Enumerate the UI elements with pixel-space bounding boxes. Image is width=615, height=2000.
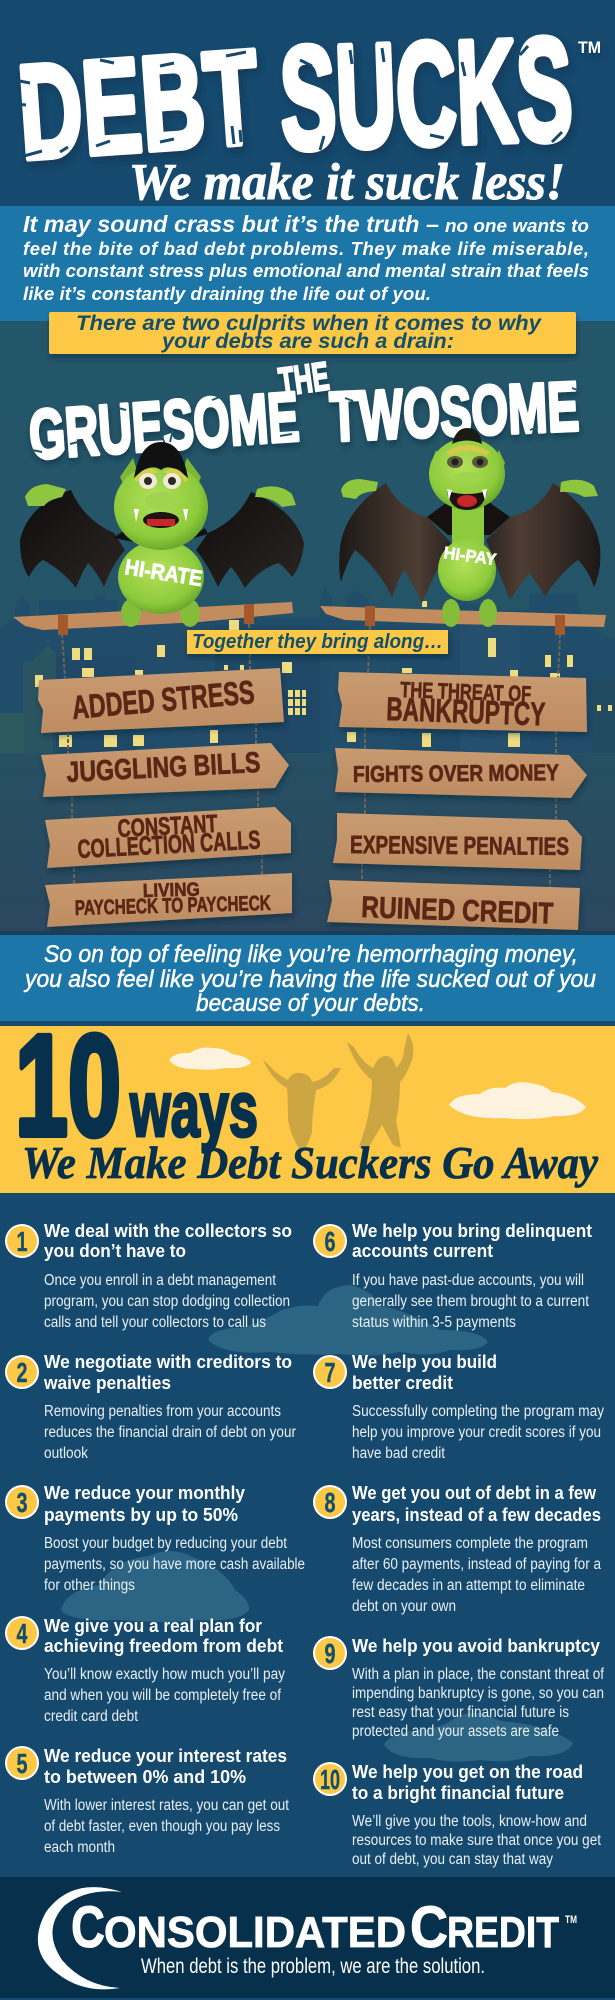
intro paragraph: It may sound crass but it’s the truth –: [23, 211, 439, 237]
sign: living paycheck to paycheck: [45, 873, 292, 927]
item 4: real plan: We give you a real plan for: [44, 1615, 262, 1636]
sign: ruined credit: [327, 880, 580, 931]
callout: two culprits: [49, 312, 576, 354]
panel: ten ways heading band: [0, 1005, 615, 1193]
tagline: When debt is the problem, we are the solution.: [141, 1955, 485, 1978]
item 6: delinquent accounts: 6: [324, 1226, 336, 1257]
item 3: monthly payments: 3: [16, 1487, 28, 1518]
callout: two culprits: your debts are such a drain:: [161, 330, 454, 353]
wings: [339, 483, 600, 603]
wordmark: C: [410, 1895, 448, 1960]
heading texture: torn edges: [32, 384, 580, 452]
monster: Hi-Pay: [339, 428, 600, 627]
item 1: collectors: [5, 1220, 292, 1331]
icon: crescent: [38, 1887, 122, 1989]
branch: right perch: [320, 606, 606, 635]
item 1: collectors: Once you enroll in a debt management: [44, 1272, 277, 1289]
item 1: collectors: We deal with the collectors so: [44, 1220, 292, 1241]
wordmark: TM: [565, 1914, 577, 1926]
intro paragraph: feel the bite of bad debt problems. They make life miserable,: [23, 238, 589, 259]
intro paragraph: no one wants to: [445, 215, 589, 236]
title texture: torn edges on the lettering: [14, 46, 562, 156]
item 3: monthly payments: for other things: [44, 1577, 135, 1594]
item 8: out of debt in years: Most consumers complete the program: [352, 1535, 588, 1552]
badge text: HI-PAY: [442, 543, 498, 569]
sign: ruined credit: RUINED CREDIT: [361, 891, 554, 931]
callout: two culprits: There are two culprits when it comes to why: [76, 312, 542, 335]
item 8: out of debt in years: [313, 1482, 601, 1615]
panel: hemorrhaging money band: [0, 931, 615, 1026]
item 6: delinquent accounts: If you have past-due accounts, you will: [352, 1272, 584, 1289]
intro paragraph: with constant stress plus emotional and mental strain that feels: [23, 260, 589, 281]
item 6: delinquent accounts: We help you bring delinquent: [352, 1220, 592, 1241]
badge text: HI-RATE: [123, 554, 204, 591]
wordmark: C: [71, 1895, 105, 1960]
sign: fights over money: [335, 748, 587, 798]
sign: the threat of bankruptcy: BANKRUPTCY: [386, 690, 546, 733]
item 5: interest rates: With lower interest rates, you can get out: [44, 1797, 290, 1814]
intro paragraph: [23, 211, 589, 304]
item 4: real plan: 4: [16, 1618, 28, 1649]
item 9: avoid bankruptcy: rest easy that your financial future is: [352, 1704, 569, 1721]
item 3: monthly payments: payments by up to 50%: [44, 1504, 238, 1525]
lit windows: [35, 601, 612, 747]
item 10: bright financial future: We help you get on the road: [352, 1761, 583, 1782]
title: Debt Sucks: [14, 7, 601, 188]
background clouds: [61, 1285, 573, 1762]
wordmark: REDIT: [447, 1908, 559, 1957]
heading: The Gruesome Twosome: THE: [276, 354, 332, 405]
heading: 10 ways: 10: [15, 1005, 121, 1166]
panel: header background: [0, 0, 615, 206]
sign: constant collection calls: COLLECTION CALLS: [77, 824, 261, 864]
panel: ten ways heading band: ways: [129, 1064, 258, 1153]
sign: constant collection calls: CONSTANT: [117, 810, 218, 843]
item 9: avoid bankruptcy: protected and your assets are safe: [352, 1723, 559, 1740]
item 8: out of debt in years: few decades in an attempt to eliminate: [352, 1577, 585, 1594]
item 7: better credit: have bad credit: [352, 1445, 446, 1462]
item 9: avoid bankruptcy: 9: [324, 1638, 336, 1669]
silhouettes: jumping people: [263, 1033, 413, 1153]
item 10: bright financial future: We’ll give you the tools, know-how and: [352, 1813, 587, 1830]
item 2: penalties: outlook: [44, 1445, 88, 1462]
item 9: avoid bankruptcy: We help you avoid bankruptcy: [352, 1635, 601, 1656]
sign: constant collection calls: [45, 807, 291, 868]
item 3: monthly payments: Boost your budget by reducing your debt: [44, 1535, 288, 1552]
heading: The Gruesome Twosome: GRUESOME: [27, 377, 301, 474]
item 4: real plan: achieving freedom from debt: [44, 1635, 283, 1656]
sign: fights over money: FIGHTS OVER MONEY: [353, 759, 559, 787]
sign: expensive penalties: [333, 813, 582, 870]
callout: together they bring along: Together they bring along…: [192, 631, 443, 653]
panel: footer logo: [0, 1877, 615, 2000]
skyline illustration: [0, 588, 615, 753]
item 5: interest rates: 5: [16, 1748, 28, 1779]
item 7: better credit: We help you build: [352, 1351, 497, 1372]
item 9: avoid bankruptcy: [313, 1635, 605, 1740]
item 4: real plan: [5, 1615, 285, 1725]
item 1: collectors: program, you can stop dodging collection: [44, 1293, 290, 1310]
item 3: monthly payments: We reduce your monthly: [44, 1482, 246, 1503]
item 7: better credit: better credit: [352, 1372, 453, 1393]
title: Debt Sucks: DEBT: [14, 23, 263, 188]
heading: The Gruesome Twosome: [27, 354, 580, 474]
item 5: interest rates: each month: [44, 1839, 115, 1856]
panel: intro text band: [0, 206, 615, 321]
item 5: interest rates: of debt faster, even though you pay less: [44, 1818, 280, 1835]
wings: [20, 490, 304, 588]
item 7: better credit: 7: [324, 1357, 336, 1388]
item 2: penalties: [5, 1351, 296, 1462]
item 5: interest rates: to between 0% and 10%: [44, 1766, 246, 1787]
item 2: penalties: waive penalties: [43, 1372, 171, 1393]
item 8: out of debt in years: debt on your own: [352, 1598, 456, 1615]
wordmark: [71, 1895, 577, 1960]
sign: living paycheck to paycheck: PAYCHECK TO PAYCHECK: [75, 892, 271, 920]
item 4: real plan: You’ll know exactly how much you’ll pay: [44, 1666, 285, 1683]
monster: Hi-Rate: [20, 442, 304, 627]
item 4: real plan: and when you will be completely free of: [44, 1687, 282, 1704]
item 8: out of debt in years: 8: [324, 1487, 336, 1518]
item 2: penalties: reduces the financial drain of debt on your: [44, 1424, 296, 1441]
panel: gruesome twosome background: [0, 321, 615, 935]
item 2: penalties: We negotiate with creditors to: [44, 1351, 292, 1372]
item 4: real plan: credit card debt: [44, 1708, 139, 1725]
item 1: collectors: calls and tell your collectors to call us: [44, 1314, 266, 1331]
sign: the threat of bankruptcy: THE THREAT OF: [400, 677, 532, 707]
item 5: interest rates: We reduce your interest rates: [44, 1745, 287, 1766]
item 3: monthly payments: [5, 1482, 305, 1594]
item 6: delinquent accounts: status within 3-5 payments: [352, 1314, 516, 1331]
item 10: bright financial future: to a bright financial future: [352, 1782, 564, 1803]
panel: hemorrhaging money band: So on top of feeling like you’re hemorrhaging money,: [44, 941, 578, 968]
wordmark: ONSOLIDATED: [104, 1908, 406, 1957]
sign: juggling bills: [41, 743, 289, 797]
item 6: delinquent accounts: generally see them brought to a current: [352, 1293, 590, 1310]
item 10: bright financial future: 10: [320, 1764, 340, 1795]
panel: ten ways list background: [0, 1193, 615, 1877]
subtitle: We make it suck less: We make it suck less!: [129, 154, 565, 211]
item 6: delinquent accounts: [313, 1220, 592, 1331]
branch: left perch: [13, 602, 293, 635]
chains connecting the signs: [62, 624, 560, 890]
item 1: collectors: you don’t have to: [44, 1240, 186, 1261]
item 10: bright financial future: [313, 1761, 602, 1868]
sign: added stress: ADDED STRESS: [70, 673, 256, 726]
item 1: collectors: 1: [16, 1226, 28, 1257]
intro paragraph: like it’s constantly draining the life out of you.: [23, 283, 431, 304]
cloud large: [449, 1082, 586, 1119]
item 7: better credit: [313, 1351, 604, 1462]
sign: juggling bills: JUGGLING BILLS: [66, 747, 261, 789]
cloud small: [169, 1048, 251, 1070]
item 3: monthly payments: payments, so you have more cash available: [44, 1556, 305, 1573]
item 2: penalties: Removing penalties from your accounts: [44, 1403, 281, 1420]
sign: living paycheck to paycheck: LIVING: [143, 880, 200, 902]
panel: hemorrhaging money band: you also feel like you’re having the life sucked out of you: [23, 966, 596, 993]
item 5: interest rates: [5, 1745, 290, 1856]
item 10: bright financial future: out of debt, you can stay that way: [352, 1851, 553, 1868]
sign: added stress: [38, 668, 284, 733]
title: Debt Sucks: TM: [578, 38, 601, 57]
sign: the threat of bankruptcy: [338, 672, 587, 733]
item 6: delinquent accounts: accounts current: [352, 1240, 493, 1261]
panel: hemorrhaging money band: because of your debts.: [196, 990, 425, 1017]
item 2: penalties: 2: [16, 1357, 28, 1388]
